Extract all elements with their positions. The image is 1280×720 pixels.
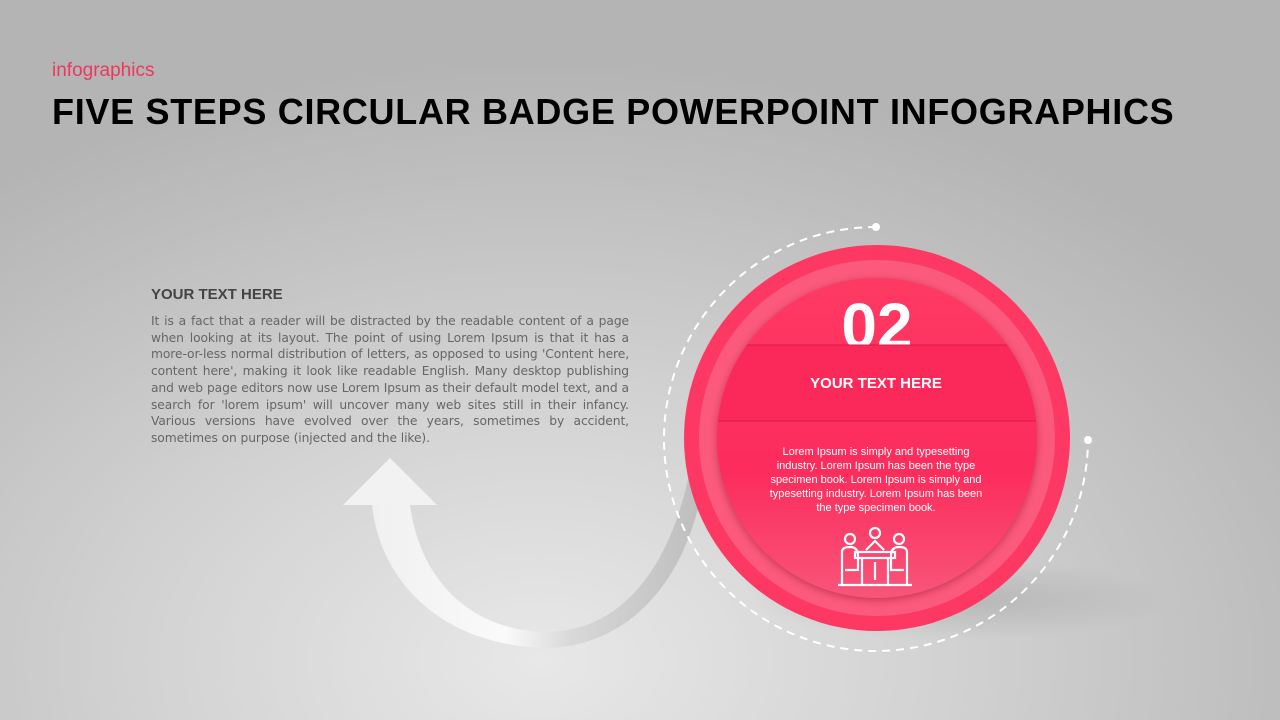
band heading: YOUR TEXT HERE [810, 375, 942, 392]
arrow [343, 458, 705, 648]
subtitle: infographics [52, 60, 154, 81]
badge body text [770, 446, 982, 514]
text block: left description: It is a fact that a reader will be distracted by the readable content of a page when looking at its layout. The point of using Lorem Ipsum is that it has a more-or-less normal distribution of letters, as opposed to using 'Content here, content here', making it look like readable English. Many desktop publishing and web page editors now use Lorem Ipsum as their default model text, and a search for 'lorem ipsum' will uncover many web sites still in their infancy. Various versions have evolved over the years, sometimes by accident, sometimes on purpose (injected and the like). [151, 314, 629, 445]
dashed ring [664, 223, 1092, 651]
number: 02 [841, 290, 913, 362]
graphic: arrow, dashed ring and badge [343, 223, 1092, 652]
badge body text: specimen book. Lorem Ipsum is simply and [771, 474, 981, 486]
badge body text: Lorem Ipsum is simply and typesetting [782, 446, 970, 458]
badge [684, 245, 1070, 631]
title: FIVE STEPS CIRCULAR BADGE POWERPOINT INFOGRAPHICS [52, 91, 1174, 132]
badge body text: the type specimen book. [816, 502, 936, 514]
badge body text: typesetting industry. Lorem Ipsum has been [770, 488, 982, 500]
text block: left description: YOUR TEXT HERE [151, 286, 283, 303]
icon: meeting [838, 528, 912, 585]
badge body text: industry. Lorem Ipsum has been the type [777, 460, 975, 472]
shadow [750, 560, 1170, 640]
band [700, 345, 1054, 421]
